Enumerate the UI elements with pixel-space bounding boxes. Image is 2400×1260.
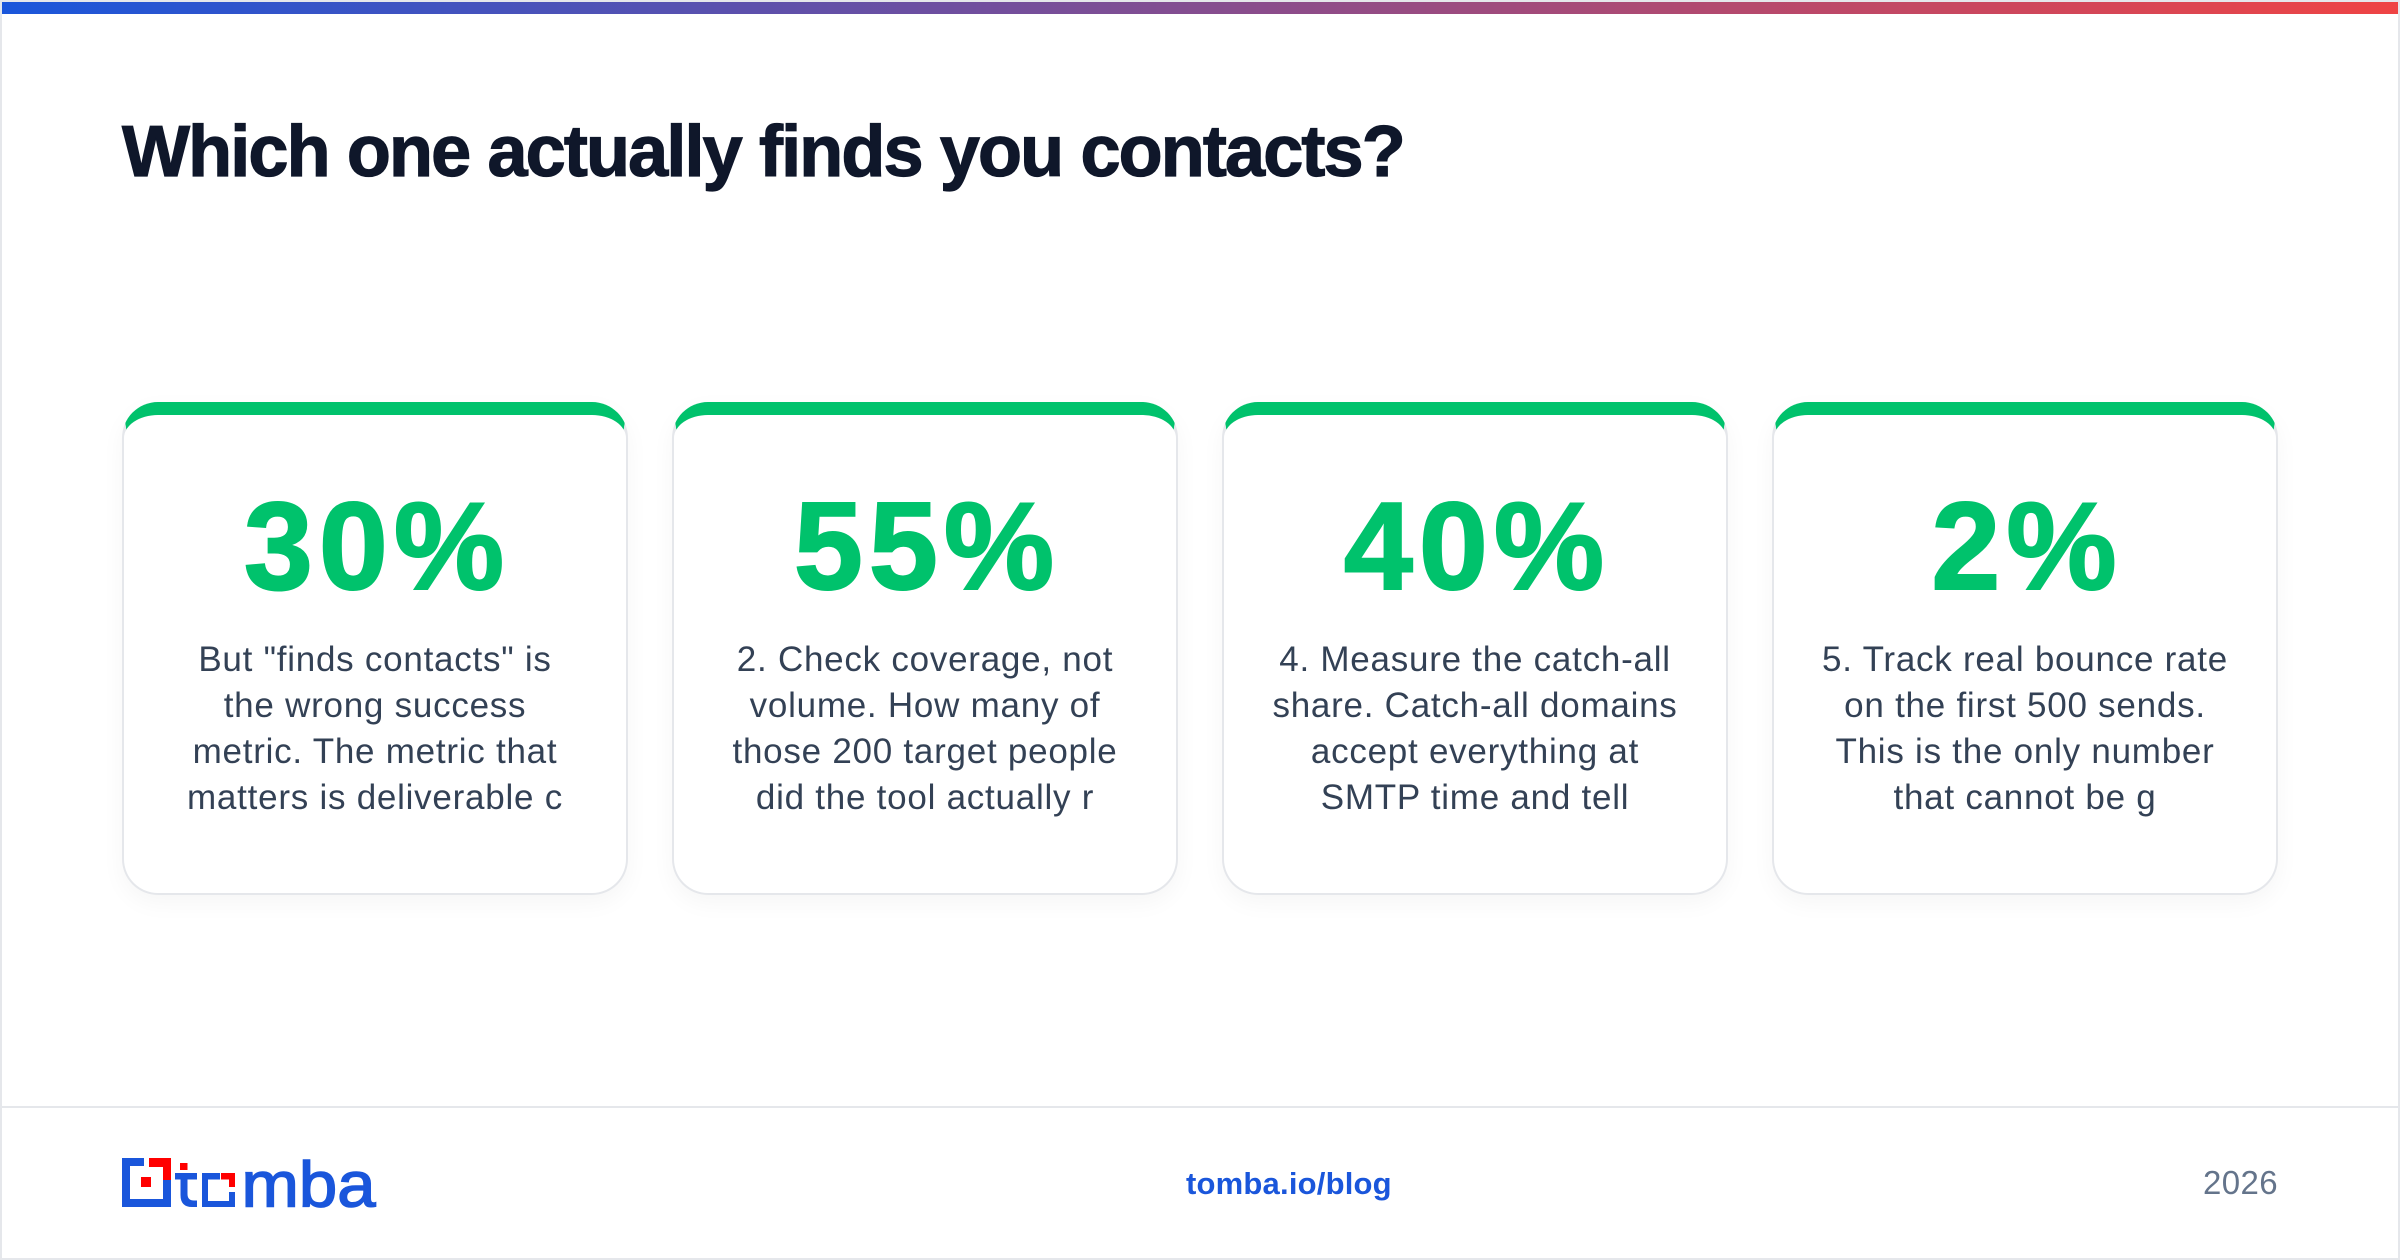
footer year: 2026 xyxy=(2203,1164,2278,1201)
top gradient bar xyxy=(2,2,2398,14)
title: Which one actually finds you contacts? xyxy=(122,112,1404,192)
description text: volume. How many of xyxy=(750,686,1100,725)
stat number: 40% xyxy=(1344,478,1610,616)
stat number: 2% xyxy=(1931,478,2123,616)
panel: stat card 40% xyxy=(1222,402,1728,895)
description text: did the tool actually r xyxy=(756,778,1094,817)
description text: 2. Check coverage, not xyxy=(737,640,1113,679)
description text xyxy=(1272,640,1678,817)
description text: SMTP time and tell xyxy=(1321,778,1629,817)
description text: metric. The metric that xyxy=(193,732,557,771)
description text: those 200 target people xyxy=(732,732,1118,771)
description text: matters is deliverable c xyxy=(187,778,563,817)
description text xyxy=(1822,640,2228,817)
logo: tomba xyxy=(122,1150,376,1214)
description text xyxy=(187,640,563,817)
description text: on the first 500 sends. xyxy=(1844,686,2206,725)
description text: share. Catch-all domains xyxy=(1272,686,1678,725)
footer divider xyxy=(2,1106,2398,1108)
panel: stat card 55% xyxy=(672,402,1178,895)
stat number: 55% xyxy=(794,478,1060,616)
description text xyxy=(732,640,1118,817)
description text: But "finds contacts" is xyxy=(198,640,552,679)
description text: 5. Track real bounce rate xyxy=(1822,640,2228,679)
description text: accept everything at xyxy=(1311,732,1639,771)
description text: the wrong success xyxy=(224,686,526,725)
stat number: 30% xyxy=(244,478,510,616)
description text: 4. Measure the catch-all xyxy=(1279,640,1671,679)
panel: stat card 2% xyxy=(1772,402,2278,895)
panel: stat card 30% xyxy=(122,402,628,895)
description text: that cannot be g xyxy=(1893,778,2157,817)
footer link: tomba.io/blog xyxy=(1186,1166,1392,1201)
description text: This is the only number xyxy=(1835,732,2215,771)
